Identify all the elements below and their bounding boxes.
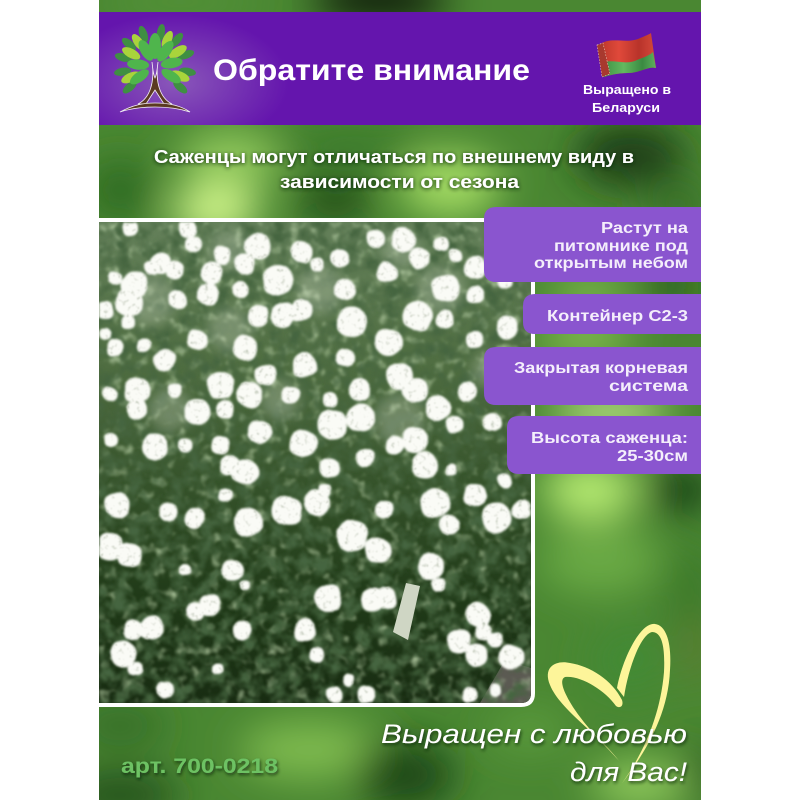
title: Обратите внимание [213, 54, 530, 87]
panel: container [523, 294, 701, 334]
panel: seedling height: Высота саженца: [531, 430, 688, 447]
slogan: для Вас! [570, 757, 688, 787]
white flower clusters [97, 221, 531, 703]
icon: Belarus flag [597, 33, 656, 77]
label: grown in Belarus: Беларуси [592, 101, 660, 115]
foliage texture [99, 222, 531, 703]
panel: seedling height [507, 416, 701, 474]
subtitle: Саженцы могут отличаться по внешнему виду в [154, 146, 634, 167]
panel: growing outdoors [484, 207, 701, 282]
label: grown in Belarus [583, 83, 671, 115]
panel: growing outdoors: питомнике под [554, 238, 688, 255]
photo frame [99, 218, 535, 707]
icon: hand-drawn heart [548, 624, 670, 790]
logo: tree [113, 23, 197, 112]
photo: flowering viburnum shrub [97, 221, 531, 703]
panel: seedling height: 25-30см [617, 448, 688, 465]
subtitle: зависимости от сезона [280, 171, 520, 192]
trunk [393, 583, 420, 640]
infographic page [99, 0, 701, 800]
panel: growing outdoors: открытым небом [534, 255, 688, 272]
panel: growing outdoors: Растут на [601, 220, 688, 237]
faint out-of-focus blossoms [124, 230, 508, 446]
slogan: Выращен с любовью [381, 719, 687, 749]
slogan [381, 719, 688, 787]
subtitle [154, 146, 634, 192]
header band [99, 12, 701, 125]
panel: root system [484, 347, 701, 405]
panel: root system: Закрытая корневая [514, 360, 688, 377]
panel: root system: система [609, 378, 688, 395]
ground patch [480, 665, 531, 703]
article number: арт. 700-0218 [121, 754, 278, 778]
panel: container: Контейнер С2-3 [547, 308, 688, 325]
label: grown in Belarus: Выращено в [583, 83, 671, 97]
